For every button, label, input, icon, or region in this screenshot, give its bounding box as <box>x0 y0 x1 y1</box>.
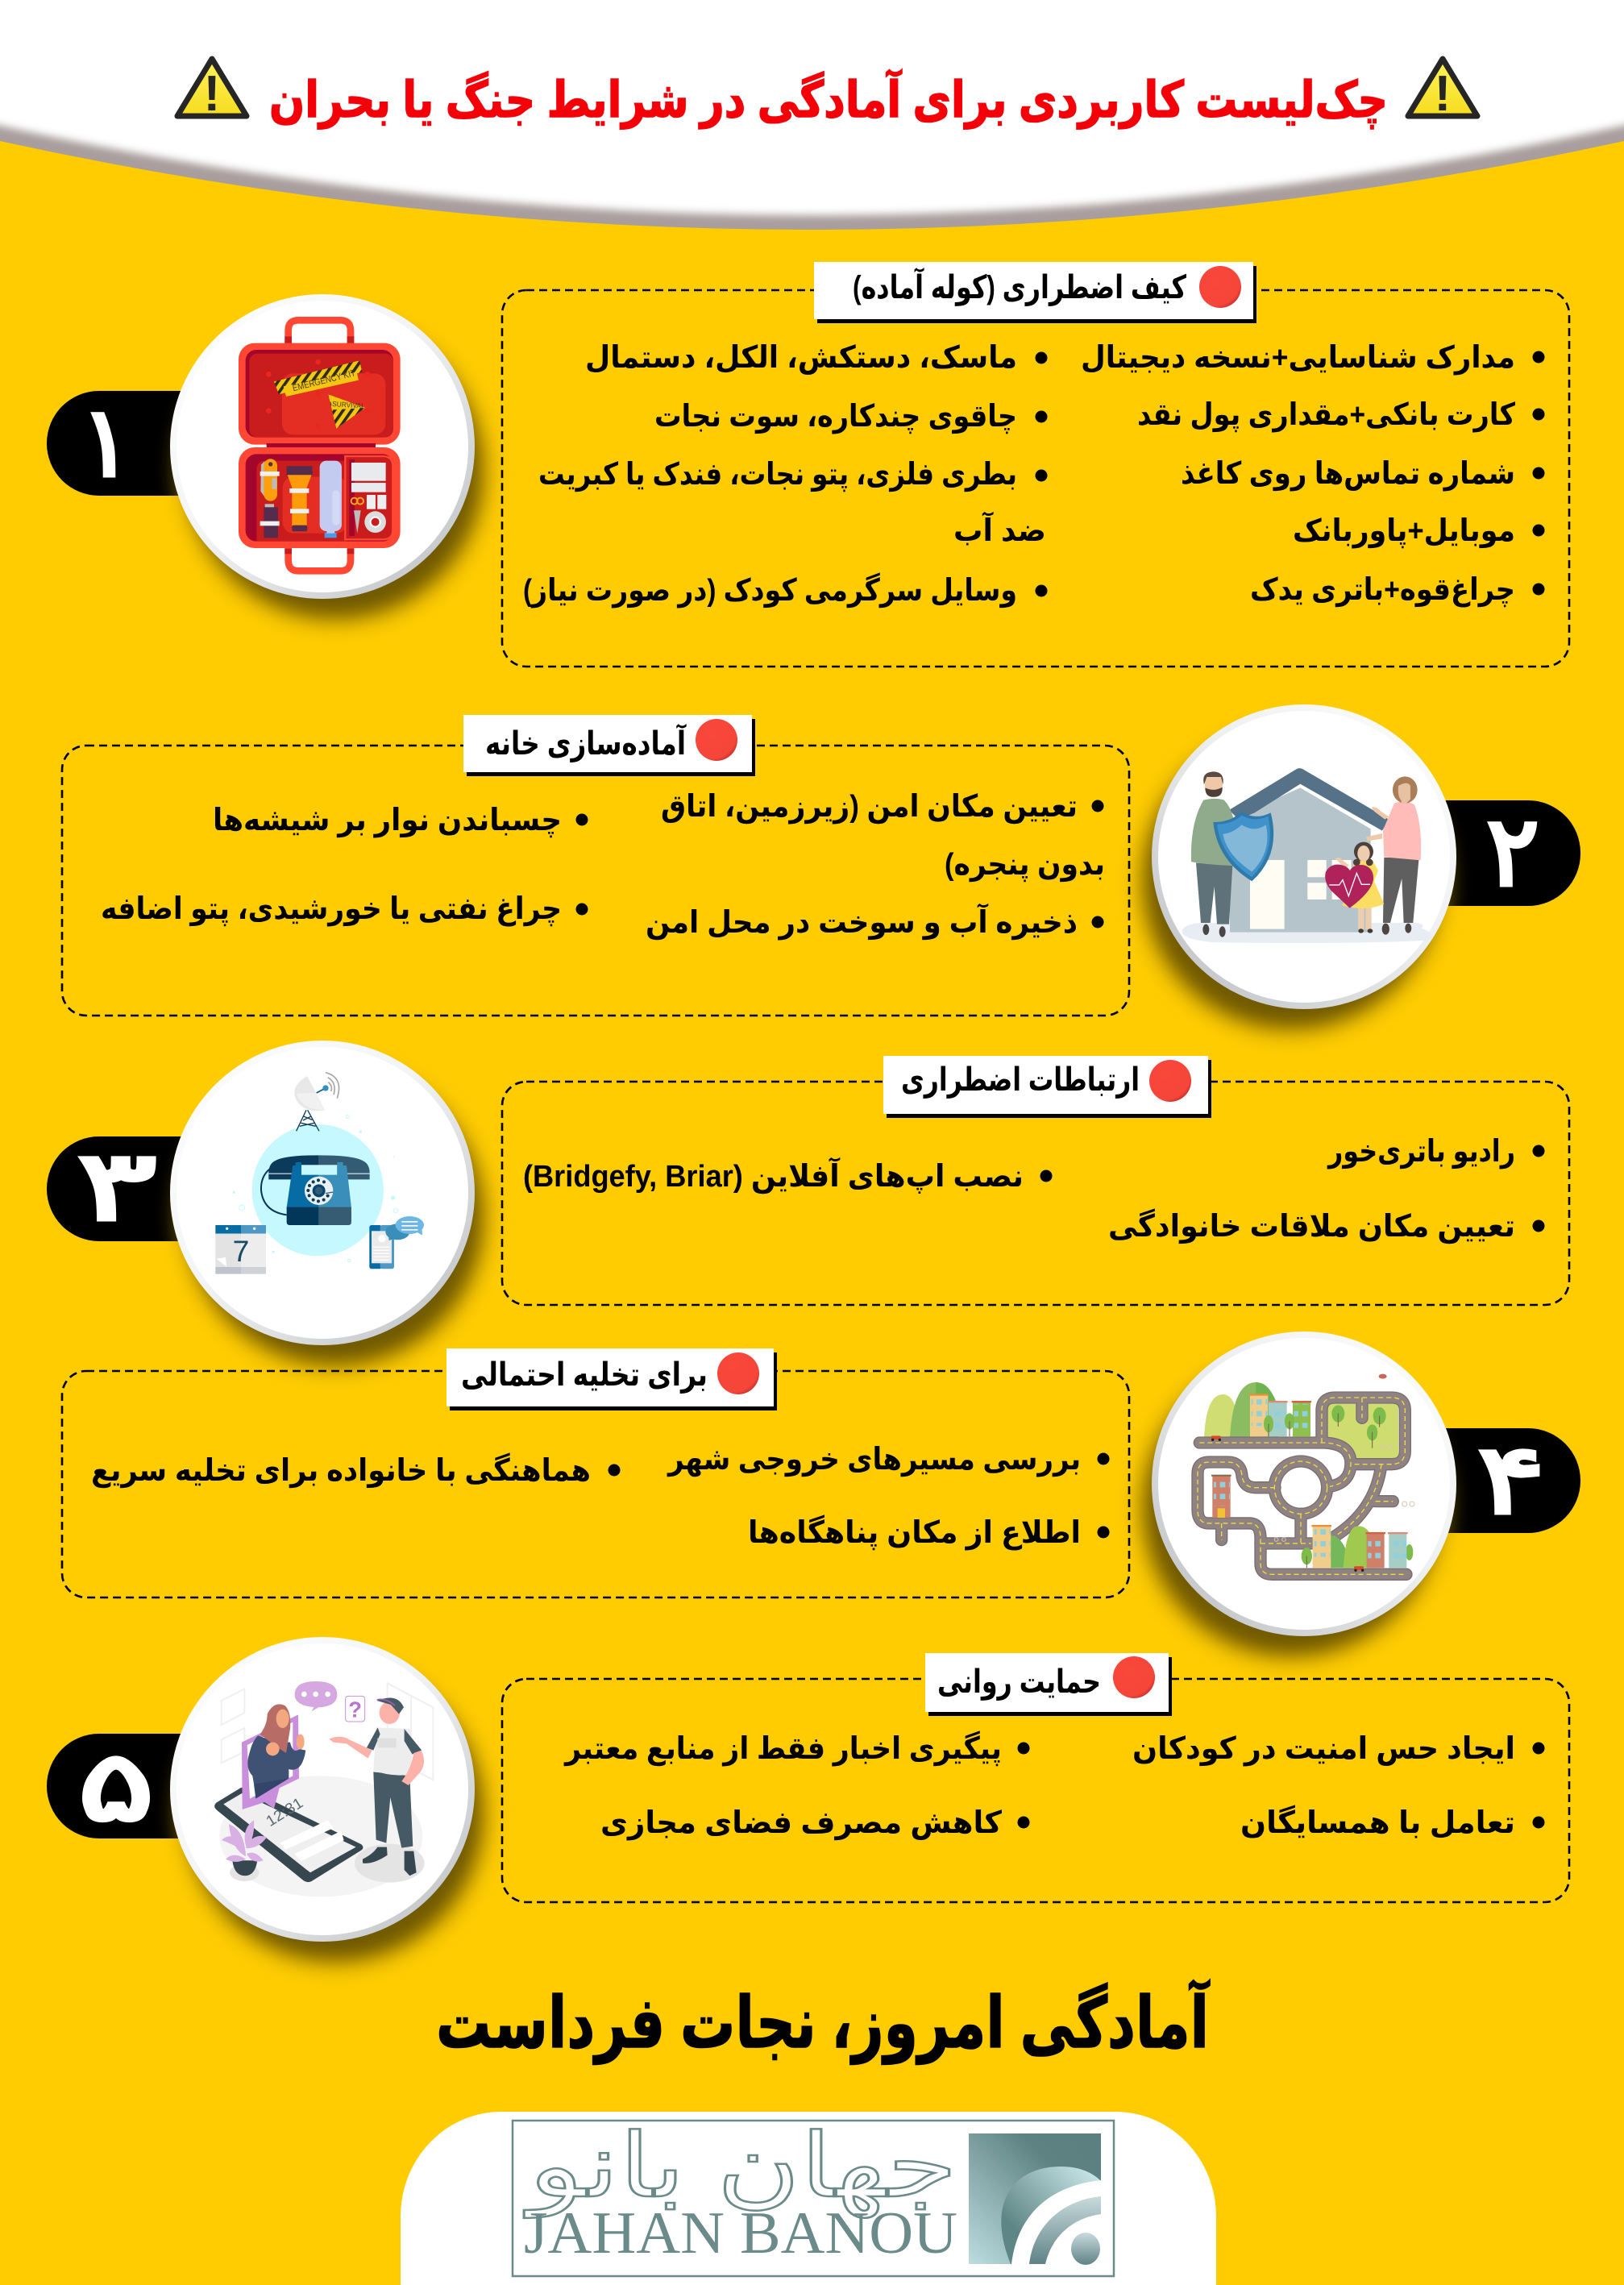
satellite dish <box>294 1076 325 1111</box>
panel 5 list left <box>563 1730 1030 1840</box>
circle frame <box>1152 704 1456 1009</box>
panel 1 list left: بطری فلزی، پتو نجات، فندک یا کبریت <box>538 458 1017 492</box>
logo frame <box>513 2121 1114 2276</box>
header band <box>0 0 1624 230</box>
icon: road map <box>1198 1374 1414 1574</box>
panel 1 list right: چراغ‌قوه+باتری یدک <box>1250 573 1515 607</box>
phone and chat <box>369 1225 382 1269</box>
shield <box>1213 812 1273 881</box>
lower town <box>1331 1535 1352 1568</box>
panel 3: emergency communications <box>502 1056 1569 1305</box>
number pill 1: ۱ <box>81 388 132 496</box>
title <box>177 59 1477 129</box>
icon: emergency kit: SURVIVAL <box>332 400 365 410</box>
number pill 3: ۳ <box>77 1132 157 1240</box>
logo mark <box>969 2133 1101 2265</box>
logo latin wordmark: JAHAN BANOU <box>524 2200 957 2266</box>
number pill 2 <box>1418 798 1580 906</box>
circle frame <box>1152 1332 1456 1636</box>
icon: family and house <box>1182 768 1433 943</box>
step 5 badge <box>47 1637 503 1981</box>
panel 3 list left: نصب اپ‌های آفلاین (Bridgefy, Briar) <box>523 1157 1024 1194</box>
step 2 badge <box>1124 704 1580 1049</box>
panel 3 list right: تعیین مکان ملاقات خانوادگی <box>1108 1208 1515 1244</box>
panel 5 list right: تعامل با همسایگان <box>1240 1805 1515 1840</box>
logo persian wordmark: جهان بانو <box>524 2117 957 2218</box>
number pill 3 <box>47 1132 210 1241</box>
panel 4 heading tag: برای تخلیه احتمالی <box>461 1357 708 1394</box>
shadow <box>168 1049 503 1385</box>
video frame <box>242 1714 299 1809</box>
panel 1 list right: کارت بانکی+مقداری پول نقد <box>1137 398 1516 432</box>
panel 5 list right <box>1132 1732 1544 1840</box>
trees <box>1264 1405 1413 1564</box>
panel 4 heading tag <box>446 1348 777 1410</box>
panel 4 list left: هماهنگی با خانواده برای تخلیه سریع <box>91 1452 591 1488</box>
handset <box>268 1155 319 1179</box>
number pill 4 <box>1418 1426 1580 1534</box>
panel 2: home preparation <box>62 715 1129 1016</box>
panel 2 heading tag: آماده‌سازی خانه <box>485 723 687 762</box>
shadow <box>168 303 503 638</box>
panel 5: psychological support <box>502 1653 1569 1902</box>
panel 5 heading tag: حمایت روانی <box>937 1664 1101 1701</box>
number pill 5: ۵ <box>77 1733 155 1841</box>
step 4 badge <box>1124 1332 1580 1676</box>
panel 3 list right: رادیو باتری‌خور <box>1327 1135 1515 1169</box>
icon: video call conversation: 12:31 <box>263 1794 306 1830</box>
panel 1: emergency bag <box>502 262 1569 667</box>
panel 2 list right <box>646 790 1105 941</box>
panel 3 heading tag <box>883 1056 1211 1118</box>
circle frame <box>170 294 475 599</box>
buildings <box>1250 1395 1268 1436</box>
step 3 badge <box>47 1041 503 1385</box>
panel 5 heading tag <box>925 1653 1172 1716</box>
panel 4 list right: بررسی مسیرهای خروجی شهر <box>667 1443 1081 1477</box>
panel 3 list right <box>1108 1135 1544 1244</box>
woman <box>1383 858 1419 923</box>
roads <box>1198 1398 1406 1574</box>
icon: warning triangle left <box>177 59 247 122</box>
icon: warning triangle right: ! <box>1435 66 1451 122</box>
shadow <box>1124 713 1459 1049</box>
man <box>1196 863 1232 924</box>
plant <box>232 1860 257 1876</box>
title text: چک‌لیست کاربردی برای آمادگی در شرایط جنگ یا بحران <box>269 69 1388 129</box>
icon: emergency kit <box>239 320 401 571</box>
panel 1 list right <box>1081 341 1544 607</box>
panel 4 list right <box>667 1443 1109 1550</box>
circle frame <box>170 1041 475 1345</box>
panel 5 list right: ایجاد حس امنیت در کودکان <box>1132 1732 1515 1766</box>
panel 2 list left: چراغ نفتی یا خورشیدی، پتو اضافه <box>101 892 562 926</box>
panel 4: possible evacuation <box>62 1348 1129 1597</box>
panel 1 list left: چاقوی چندکاره، سوت نجات <box>654 400 1017 434</box>
number pill 5 <box>47 1733 210 1841</box>
panel 1 list right: موبایل+پاوربانک <box>1293 514 1515 549</box>
speech bubbles <box>295 1681 337 1711</box>
icon: emergency kit: EMERGENCY KIT <box>292 368 356 393</box>
shadow <box>168 1646 503 1981</box>
panel 1 list right: شماره تماس‌ها روی کاغذ <box>1181 457 1515 492</box>
icon: telephone <box>215 1073 424 1274</box>
calendar <box>215 1225 241 1234</box>
icon: warning triangle right <box>1408 59 1477 122</box>
panel 4 list right: اطلاع از مکان پناهگاه‌ها <box>748 1514 1081 1550</box>
panel 5 list left: کاهش مصرف فضای مجازی <box>600 1806 1003 1840</box>
panel 2 heading tag <box>463 715 755 776</box>
icon: video call conversation: ? <box>348 1697 362 1722</box>
girl <box>1358 907 1372 929</box>
panel 2 list right: بدون پنجره) <box>945 848 1105 883</box>
icon: video call conversation <box>214 1681 433 1897</box>
phone <box>214 1788 363 1882</box>
panel 2 list right: تعیین مکان امن (زیرزمین، اتاق <box>661 790 1078 824</box>
heart <box>1325 865 1373 908</box>
panel 1 list left: وسایل سرگرمی کودک (در صورت نیاز) <box>523 572 1017 609</box>
circle frame <box>170 1637 475 1942</box>
number pill 4: ۴ <box>1477 1426 1546 1534</box>
panel 1 list left: ماسک، دستکش، الکل، دستمال <box>585 341 1017 375</box>
number pill 2: ۲ <box>1486 798 1539 906</box>
panel 2 list left <box>101 804 588 926</box>
logo card <box>401 2112 1216 2285</box>
panel 3 heading tag: ارتباطات اضطراری <box>901 1062 1140 1099</box>
panel 1 heading tag: کیف اضطراری (کوله آماده) <box>853 267 1187 306</box>
body <box>287 1165 319 1207</box>
shadow <box>1124 1340 1459 1676</box>
panel 1 heading tag <box>814 262 1256 323</box>
woman <box>254 1771 289 1799</box>
icon: telephone: 7 <box>233 1234 249 1268</box>
man <box>373 1772 413 1848</box>
panel 1 list right: مدارک شناسایی+نسخه دیجیتال <box>1081 341 1515 375</box>
step 1 badge <box>47 294 503 638</box>
panel 1 list left <box>523 341 1048 609</box>
panel 2 list left: چسباندن نوار بر شیشه‌ها <box>213 804 562 837</box>
panel 1 list left: ضد آب <box>953 511 1046 548</box>
panel 5 list left: پیگیری اخبار فقط از منابع معتبر <box>563 1730 1002 1766</box>
icon: warning triangle left: ! <box>204 66 220 122</box>
panel 2 list right: ذخیره آب و سوخت در محل امن <box>646 903 1078 941</box>
number pill 1 <box>47 388 210 496</box>
slogan: آمادگی امروز، نجات فرداست <box>436 1979 1210 2065</box>
